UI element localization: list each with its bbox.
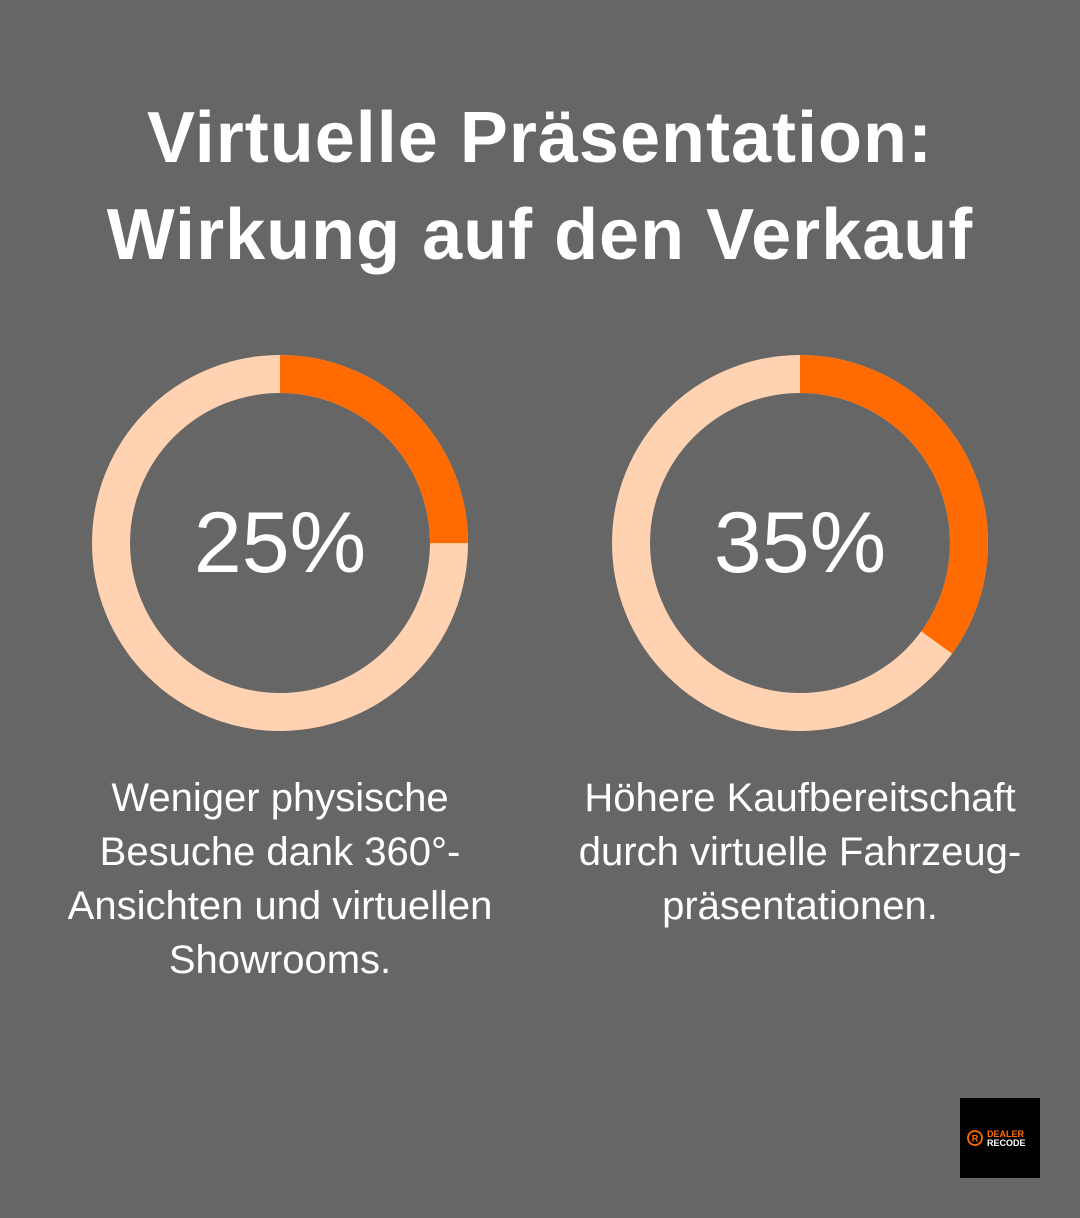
caption right [579,776,1021,928]
logo: DEALER [987,1129,1025,1139]
title: Virtuelle Präsentation: [147,98,933,178]
caption left [68,776,492,982]
caption left: Besuche dank 360°- [100,830,460,874]
logo: R [972,1134,979,1144]
title [106,98,973,275]
caption left: Weniger physische [111,776,449,820]
logo: RECODE [987,1138,1026,1148]
caption right: präsentationen. [662,884,938,928]
caption right: Höhere Kaufbereitschaft [584,776,1016,820]
chart: donut 35% [612,355,988,731]
caption left: Ansichten und virtuellen [68,884,492,928]
caption right: durch virtuelle Fahrzeug- [579,830,1021,874]
chart: donut 35%: 35% [714,495,886,591]
title: Wirkung auf den Verkauf [107,195,973,275]
chart: donut 25%: 25% [194,495,366,591]
logo [960,1098,1040,1178]
caption left: Showrooms. [169,938,391,982]
chart: donut 25% [92,355,468,731]
